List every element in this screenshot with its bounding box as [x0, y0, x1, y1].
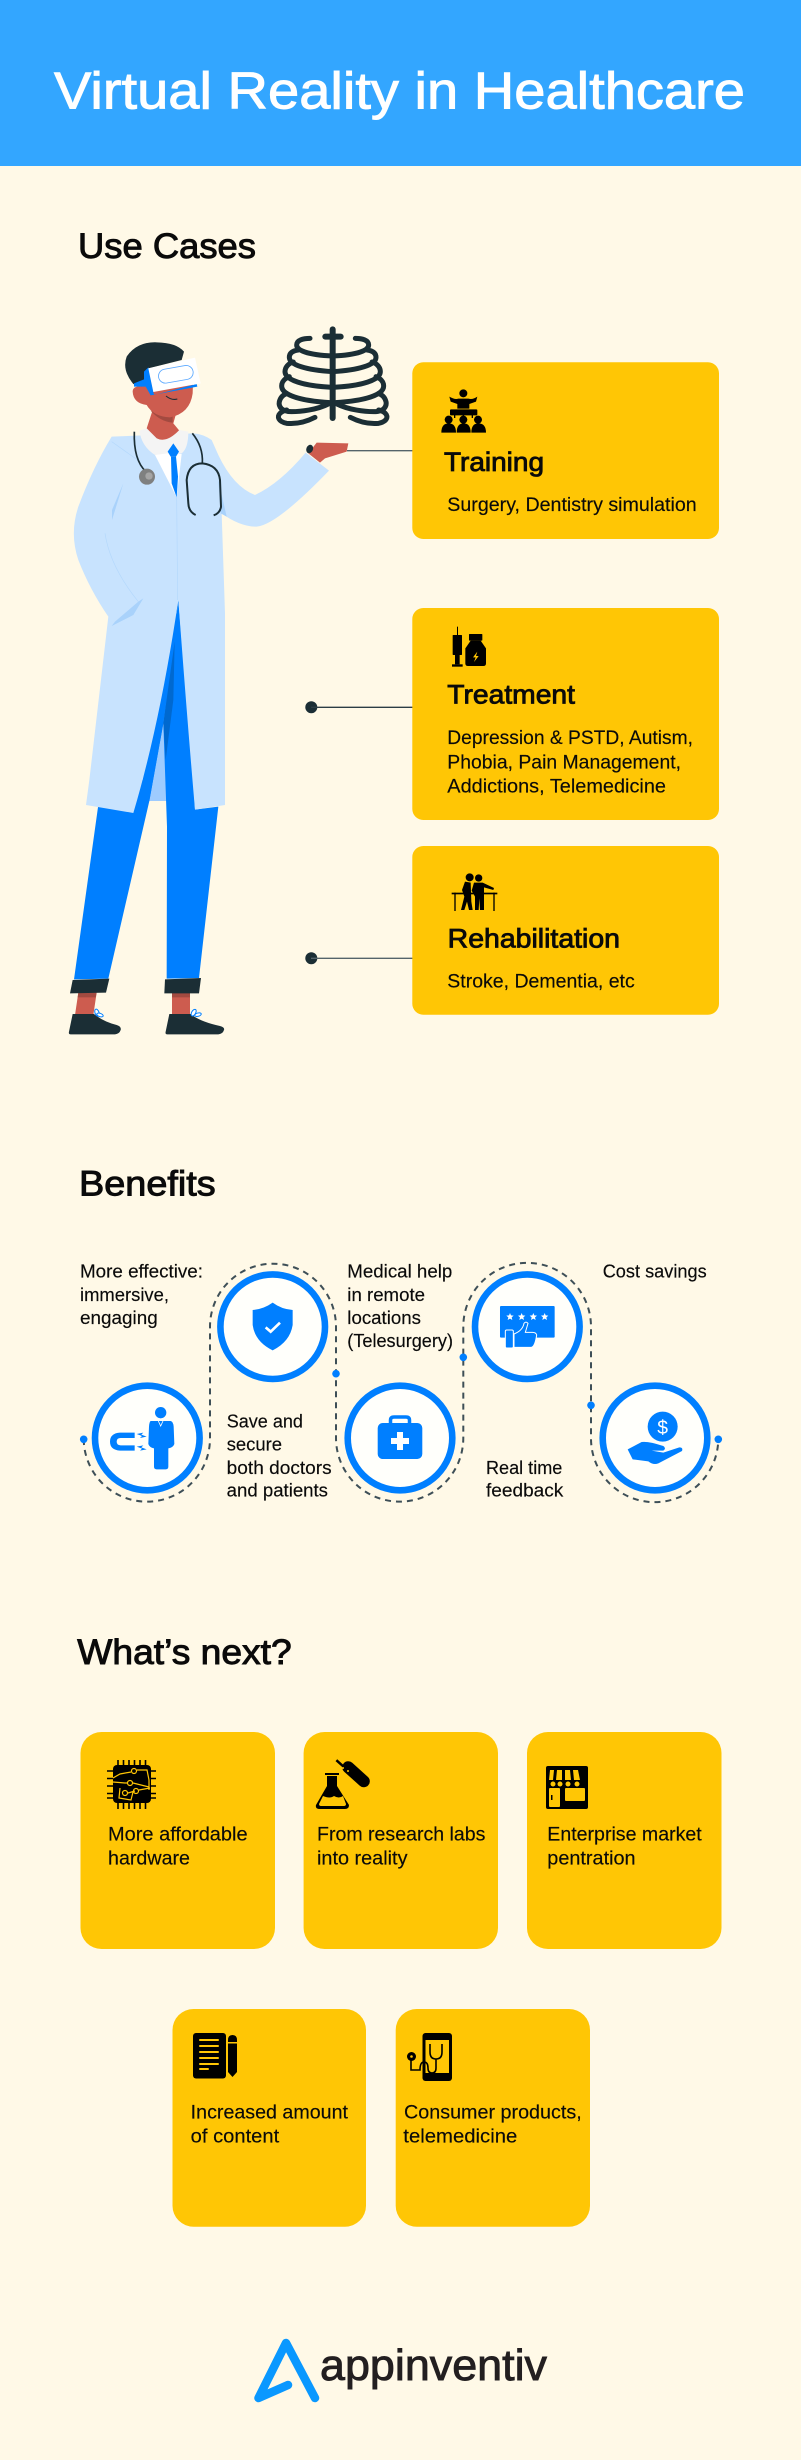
- logo: appinventiv: appinventiv: [320, 2341, 547, 2390]
- benefit text: save and secure: [227, 1411, 332, 1501]
- benefit text: cost savings: Cost savings: [603, 1261, 707, 1282]
- benefit text: medical help: Medical help: [347, 1261, 452, 1282]
- panel: affordable hardware: [80, 1732, 275, 1949]
- icon: rehabilitation bars: [452, 873, 497, 911]
- card title: Treatment: [447, 680, 576, 710]
- benefit text: real time feedback: feedback: [486, 1480, 564, 1501]
- card text: From research labs: [317, 1824, 486, 1846]
- benefit text: more effective: [80, 1261, 203, 1328]
- benefit icon: hand with coin: $: [657, 1418, 668, 1439]
- benefit text: more effective: More effective:: [80, 1261, 203, 1282]
- benefit text: save and secure: secure: [227, 1434, 282, 1455]
- benefit text: medical help: locations: [347, 1307, 421, 1328]
- panel: enterprise market: [527, 1732, 722, 1949]
- card text: into reality: [317, 1848, 408, 1870]
- card text: Increased amount: [191, 2101, 349, 2123]
- connector: rehabilitation: [305, 952, 413, 964]
- icon: flask and test tube: [316, 1759, 372, 1809]
- card text: [108, 1824, 248, 1870]
- benefit text: real time feedback: [486, 1457, 564, 1501]
- icon: rib cage x-ray: [278, 329, 387, 424]
- heading: use cases: Use Cases: [78, 227, 256, 266]
- heading: benefits: Benefits: [79, 1165, 216, 1204]
- panel: rehabilitation: [412, 846, 719, 1015]
- benefit text: save and secure: and patients: [227, 1480, 328, 1501]
- panel: increased content: [172, 2009, 366, 2227]
- card text: Surgery, Dentistry simulation: [447, 494, 697, 516]
- card text: Addictions, Telemedicine: [447, 776, 666, 798]
- card text: Consumer products,: [404, 2101, 582, 2123]
- benefit text: more effective: immersive,: [80, 1284, 169, 1305]
- icon: storefront: [546, 1766, 588, 1809]
- card text: Depression & PSTD, Autism,: [447, 727, 693, 749]
- card text: Stroke, Dementia, etc: [447, 971, 635, 993]
- logo: appinventiv: [258, 2341, 547, 2398]
- title: Virtual Reality in Healthcare: [54, 63, 745, 121]
- benefit icon: shield: [220, 1274, 325, 1379]
- card title: Training: [444, 447, 544, 477]
- panel: training: [412, 362, 719, 539]
- card text: of content: [191, 2125, 280, 2147]
- card title: Rehabilitation: [448, 924, 620, 954]
- card text: hardware: [108, 1848, 190, 1870]
- panel: research labs: [304, 1732, 498, 1949]
- panel: treatment: [412, 608, 719, 820]
- connector: treatment: [305, 701, 413, 713]
- card text: More affordable: [108, 1824, 248, 1846]
- benefit icon: hand with coin: [603, 1386, 707, 1490]
- card text: [191, 2101, 349, 2147]
- dashed connector path: [80, 1263, 722, 1502]
- benefit text: more effective: engaging: [80, 1307, 158, 1328]
- benefit icon: medical kit: [348, 1386, 452, 1490]
- card text: [447, 727, 693, 798]
- icon: phone with stethoscope: [407, 2033, 452, 2081]
- card text: Phobia, Pain Management,: [447, 751, 681, 773]
- benefit icon: rating feedback: [475, 1274, 580, 1379]
- benefit text: medical help: (Telesurgery): [347, 1330, 453, 1351]
- icon: syringe and bottle: [452, 627, 486, 667]
- benefit text: save and secure: both doctors: [227, 1457, 332, 1478]
- connector: hand to training: [347, 450, 413, 452]
- benefit icon: magnet attracting person: [95, 1386, 200, 1490]
- card text: [403, 2101, 582, 2147]
- card text: telemedicine: [403, 2125, 517, 2147]
- benefit text: medical help: [347, 1261, 453, 1351]
- benefit text: medical help: in remote: [347, 1284, 425, 1305]
- benefit text: real time feedback: Real time: [486, 1457, 562, 1478]
- icon: training group: [441, 389, 486, 433]
- card text: [317, 1824, 486, 1870]
- illustration: doctor wearing VR headset: [69, 342, 348, 1034]
- header banner: [0, 0, 801, 166]
- icon: document and pencil: [193, 2033, 237, 2078]
- panel: consumer products: [396, 2009, 590, 2227]
- card text: [547, 1824, 702, 1870]
- benefit text: save and secure: Save and: [227, 1411, 303, 1432]
- icon: chip: [107, 1760, 156, 1809]
- heading: what's next: What’s next?: [77, 1633, 292, 1672]
- card text: Enterprise market: [547, 1824, 702, 1846]
- card text: pentration: [547, 1848, 636, 1870]
